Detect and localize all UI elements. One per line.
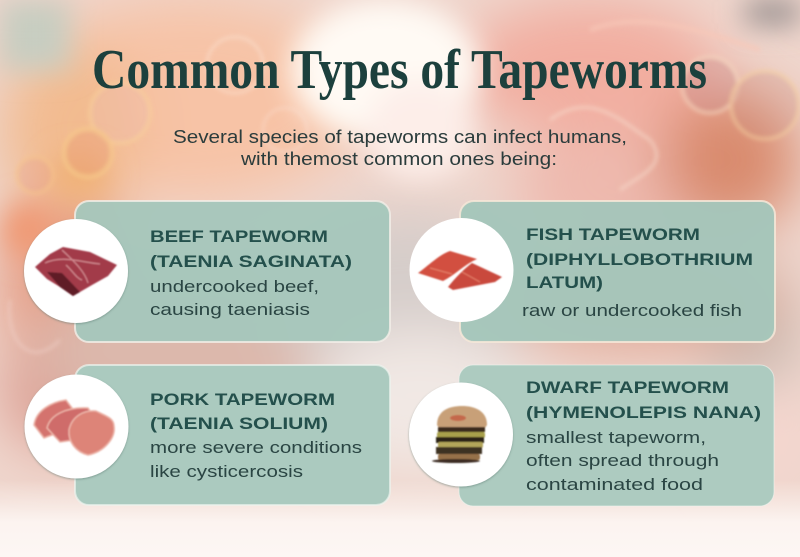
card: beef tapeworm bbox=[75, 201, 390, 342]
text: dwarf tapeworm: often spread through bbox=[526, 451, 719, 470]
text: beef tapeworm: BEEF TAPEWORM bbox=[150, 227, 328, 246]
card: pork tapeworm bbox=[75, 365, 390, 505]
panel: fish tapeworm bbox=[410, 201, 775, 342]
text: pork tapeworm: like cysticercosis bbox=[150, 462, 303, 481]
text: beef tapeworm: (TAENIA SAGINATA) bbox=[150, 252, 352, 271]
icon: burger bbox=[409, 382, 513, 486]
text: beef tapeworm bbox=[150, 227, 352, 319]
text: pork tapeworm: more severe conditions bbox=[150, 438, 362, 457]
text: dwarf tapeworm: smallest tapeworm, bbox=[526, 428, 706, 447]
text: dwarf tapeworm: (HYMENOLEPIS NANA) bbox=[526, 403, 761, 422]
text: fish tapeworm bbox=[522, 225, 753, 320]
text: dwarf tapeworm bbox=[526, 378, 761, 494]
title: Common Types of Tapeworms bbox=[92, 39, 707, 101]
text: fish tapeworm: (DIPHYLLOBOTHRIUM bbox=[526, 250, 753, 269]
text: beef tapeworm: undercooked beef, bbox=[150, 277, 319, 296]
text: dwarf tapeworm: DWARF TAPEWORM bbox=[526, 378, 729, 397]
panel: pork tapeworm bbox=[24, 365, 390, 505]
text: beef tapeworm: causing taeniasis bbox=[150, 300, 310, 319]
icon: pork chops bbox=[24, 374, 128, 478]
subtitle: with themost common ones being: bbox=[240, 149, 557, 169]
card: fish tapeworm bbox=[460, 201, 775, 342]
text: pork tapeworm: PORK TAPEWORM bbox=[150, 390, 335, 409]
panel: dwarf tapeworm bbox=[409, 365, 774, 506]
icon: fish fillets bbox=[410, 218, 514, 322]
text: fish tapeworm: LATUM) bbox=[526, 273, 603, 292]
background: bubbles and membrane highlights bbox=[9, 22, 799, 352]
subtitle bbox=[173, 127, 627, 169]
text: dwarf tapeworm: contaminated food bbox=[526, 475, 703, 494]
icon: beef cut bbox=[24, 219, 128, 323]
text: pork tapeworm: (TAENIA SOLIUM) bbox=[150, 414, 328, 433]
text: fish tapeworm: raw or undercooked fish bbox=[522, 301, 742, 320]
text: pork tapeworm bbox=[150, 390, 362, 481]
text: fish tapeworm: FISH TAPEWORM bbox=[526, 225, 700, 244]
panel: beef tapeworm bbox=[24, 201, 390, 342]
subtitle: Several species of tapeworms can infect humans, bbox=[173, 127, 627, 147]
card: dwarf tapeworm bbox=[459, 365, 774, 506]
